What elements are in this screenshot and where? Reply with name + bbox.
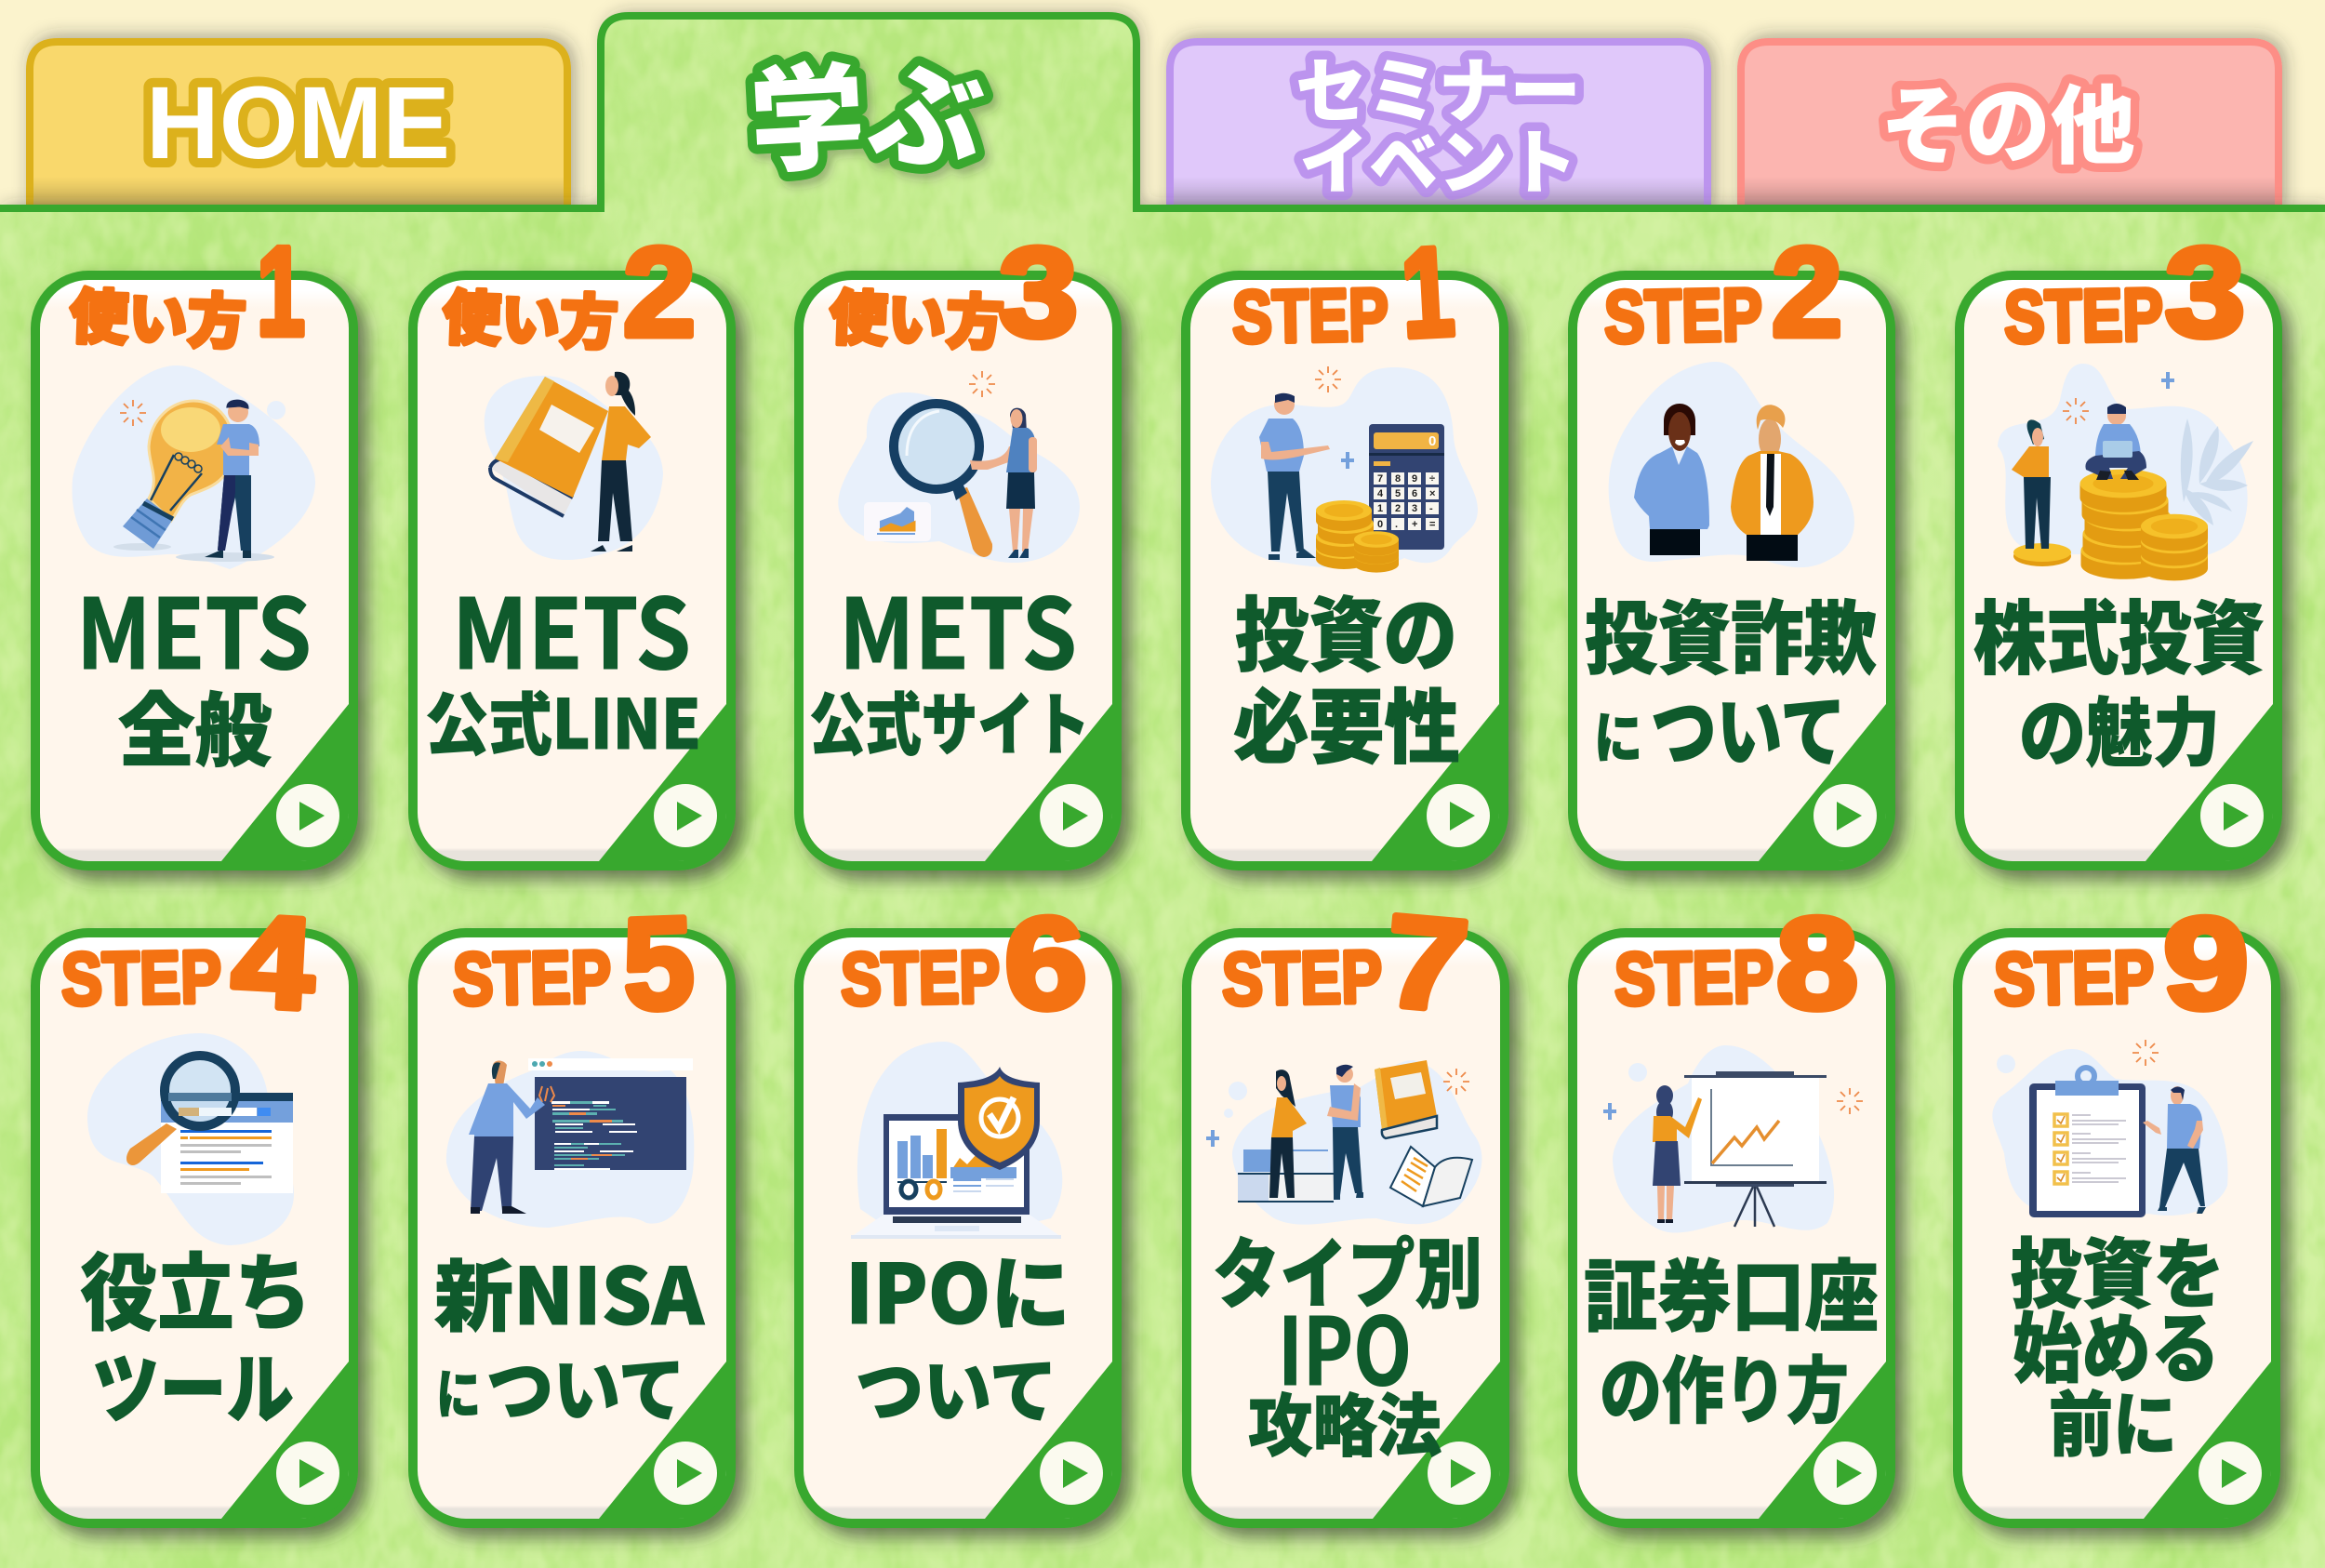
heading: step 3: STEP (2003, 273, 2164, 358)
heading: step 5: 5 (620, 889, 697, 1037)
title: need for investing: 投資の (1235, 571, 1457, 688)
title: investment fraud (1585, 574, 1877, 783)
icon: man with calculator and coins: 789÷ (1377, 473, 1435, 485)
title: new NISA: 新NISA (434, 1235, 706, 1348)
title: METS general (76, 556, 312, 782)
icon: woman and man (1609, 362, 1854, 567)
tab label: seminar: セミナー (1295, 34, 1581, 137)
card: step 5 new NISA (408, 889, 736, 1528)
title: about IPO: ついて (856, 1335, 1057, 1437)
heading: usage 3: 使い方 (828, 271, 1006, 362)
title: opening a brokerage account: の作り方 (1600, 1334, 1849, 1438)
heading: step 5: STEP (452, 935, 612, 1020)
card: usage 2 METS official LINE (408, 221, 736, 870)
title: useful tools (80, 1226, 312, 1439)
icon: woman presenting chart (1603, 1045, 1863, 1233)
title: METS general: 全般 (118, 666, 272, 782)
card: usage 3 METS official site (794, 221, 1122, 870)
tab label: event: イベント (1299, 106, 1577, 208)
card: step 6 IPO (794, 888, 1122, 1528)
title: METS official LINE (425, 556, 701, 769)
title: IPO strategy by type: IPO (1278, 1277, 1412, 1412)
heading: step 4: STEP (60, 935, 222, 1020)
title: new NISA (434, 1235, 706, 1436)
title: investment fraud: に (1594, 694, 1642, 775)
icon: man at code screen (446, 1051, 694, 1228)
heading: step 7 (1221, 886, 1474, 1039)
title: before you start investing (2011, 1213, 2225, 1470)
heading: step 8: 8 (1776, 890, 1858, 1036)
heading: step 2: STEP (1603, 273, 1763, 358)
heading: step 7: 7 (1379, 886, 1474, 1039)
title: before you start investing: 始める (2013, 1287, 2220, 1398)
title: need for investing: 必要性 (1233, 663, 1460, 780)
heading: step 4: 4 (229, 887, 318, 1037)
title: opening a brokerage account: 証券口座 (1584, 1235, 1879, 1348)
tab label: HOME: HOME (146, 66, 450, 180)
heading: usage 1 (68, 220, 305, 362)
icon: light bulb and man (73, 365, 315, 569)
heading: usage 3: 3 (999, 221, 1078, 363)
tab label: study (745, 21, 991, 196)
heading: step 9: 9 (2163, 890, 2249, 1036)
card: step 3 appeal of stocks (1955, 221, 2282, 870)
title: METS official LINE: METS (452, 556, 691, 697)
heading: step 6 (840, 888, 1090, 1038)
tab label: study: 学 (745, 23, 870, 196)
card: step 1 need for investing (1181, 220, 1508, 870)
title: need for investing (1233, 571, 1460, 780)
icon: man with calculator and coins: 123- (1377, 503, 1433, 514)
tab: other (1741, 42, 2278, 208)
heading: usage 2: 2 (623, 221, 696, 363)
title: appeal of stock investing: の魅力 (2019, 674, 2220, 782)
title: useful tools: 役立ち (80, 1226, 312, 1347)
heading: step 1: STEP (1231, 273, 1389, 358)
title: METS official LINE: 公式LINE (425, 671, 701, 769)
title: useful tools: ツール (92, 1328, 294, 1439)
heading: step 4 (60, 887, 318, 1037)
icon: laptop with shield (851, 1042, 1062, 1239)
title: new NISA: ついて (486, 1334, 685, 1436)
card: step 9 before starting (1953, 890, 2280, 1528)
icon: man with calculator and coins: 0.+= (1377, 519, 1435, 530)
title: investment fraud: 投資詐欺 (1585, 574, 1877, 690)
heading: step 7: STEP (1221, 936, 1383, 1020)
icon: people with books (1206, 1060, 1481, 1225)
title: about IPO (845, 1229, 1070, 1437)
heading: step 1: 1 (1398, 220, 1457, 364)
icon: man with calculator and coins: 0 (1428, 433, 1436, 449)
tab: seminar and events (1170, 34, 1707, 208)
card: step 2 investment fraud (1568, 221, 1895, 870)
title: appeal of stock investing: 株式投資 (1973, 574, 2265, 690)
card: usage 1 METS general (31, 220, 358, 870)
title: METS official site (809, 556, 1090, 769)
title: IPO strategy by type: タイプ別 (1213, 1213, 1482, 1323)
heading: usage 3 (828, 221, 1078, 363)
tab: HOME (30, 42, 567, 208)
heading: step 1 (1231, 220, 1457, 364)
title: METS official site: 公式サイト (809, 671, 1090, 769)
icon: man with calculator and coins (1211, 366, 1478, 573)
icon: magnifier and woman (838, 371, 1080, 563)
title: IPO strategy by type: 攻略法 (1248, 1372, 1442, 1470)
heading: step 3 (2003, 221, 2245, 363)
title: appeal of stock investing (1973, 574, 2265, 782)
heading: step 6: 6 (1001, 888, 1090, 1038)
heading: step 3: 3 (2165, 221, 2245, 363)
icon: clipboard checklist and man (1992, 1040, 2228, 1217)
heading: usage 1: 1 (257, 220, 305, 362)
title: new NISA: に (436, 1351, 481, 1429)
heading: step 6: STEP (840, 936, 1001, 1020)
title: before you start investing: 投資を (2011, 1213, 2225, 1323)
card: step 4 useful tools (31, 887, 358, 1528)
title: IPO strategy by type (1213, 1213, 1482, 1470)
heading: step 9 (1993, 890, 2249, 1036)
heading: usage 2: 使い方 (441, 271, 620, 362)
icon: woman with book (485, 372, 663, 560)
heading: step 8: STEP (1614, 935, 1774, 1020)
icon: people and coin stacks (1998, 364, 2253, 580)
heading: usage 1: 使い方 (68, 270, 248, 361)
tab label: other: その他 (1880, 58, 2135, 181)
title: investment fraud: ついて (1651, 671, 1846, 783)
icon: magnifier on web page (87, 1033, 294, 1245)
title: METS general: METS (76, 556, 312, 697)
heading: step 2 (1603, 221, 1842, 363)
title: opening a brokerage account (1584, 1235, 1879, 1438)
icon: man with calculator and coins: 456× (1377, 488, 1435, 499)
tab label: study: ぶ (861, 21, 991, 196)
title: METS official site: METS (839, 556, 1077, 697)
title: before you start investing: 前に (2049, 1368, 2177, 1470)
card: step 8 brokerage account (1568, 890, 1895, 1528)
card: step 7 IPO strategy by type (1182, 886, 1509, 1528)
heading: step 9: STEP (1993, 936, 2155, 1020)
heading: step 8 (1614, 890, 1858, 1036)
heading: step 5 (452, 889, 697, 1037)
heading: usage 2 (441, 221, 696, 363)
title: about IPO: IPOに (845, 1229, 1070, 1348)
heading: step 2: 2 (1772, 221, 1842, 363)
